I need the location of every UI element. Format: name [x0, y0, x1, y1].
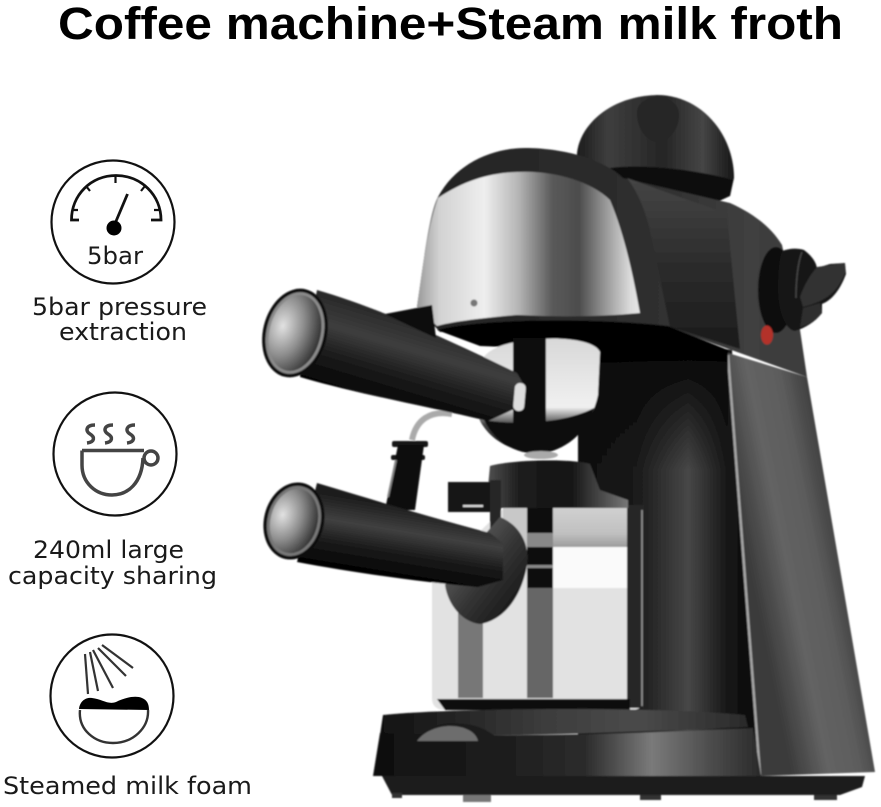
wand mounting disc — [445, 517, 528, 624]
power indicator light — [761, 326, 773, 344]
stainless steel hood — [417, 172, 640, 326]
label: 240ml large capacity sharing: capacity sharing — [8, 562, 217, 590]
feature: steamed milk foam — [3, 634, 252, 800]
steam pipe — [385, 413, 452, 510]
machine feet — [392, 793, 837, 802]
group head — [476, 338, 600, 454]
drip tray — [380, 709, 748, 736]
upper housing — [417, 148, 807, 377]
machine column — [578, 330, 760, 775]
icon: pressure gauge: 5bar — [87, 242, 143, 270]
icon: milk foam bowl — [50, 634, 174, 758]
label: 240ml large capacity sharing — [8, 536, 217, 590]
label: 5bar pressure extraction: 5bar pressure — [32, 293, 207, 321]
icon: steaming cup — [54, 392, 176, 516]
machine base — [373, 723, 865, 795]
steam wand lower — [255, 476, 503, 587]
hood badge — [470, 300, 478, 306]
feature: 5bar pressure — [32, 160, 207, 346]
label: 240ml large capacity sharing: 240ml large — [33, 536, 184, 564]
label: 5bar pressure extraction — [32, 293, 207, 346]
label: steamed milk foam: Steamed milk foam — [3, 772, 252, 800]
top water tank cap — [577, 95, 734, 210]
feature: 240ml capacity — [8, 392, 217, 590]
under-hood recess — [437, 320, 728, 470]
carafe lid — [448, 451, 628, 535]
label: 5bar pressure extraction: extraction — [59, 318, 187, 346]
glass carafe — [432, 505, 644, 710]
coffee machine — [253, 95, 875, 802]
right body panel — [728, 353, 875, 776]
icon: pressure gauge — [52, 160, 174, 284]
steam wand upper — [253, 282, 526, 421]
rotary steam knob — [758, 247, 846, 333]
